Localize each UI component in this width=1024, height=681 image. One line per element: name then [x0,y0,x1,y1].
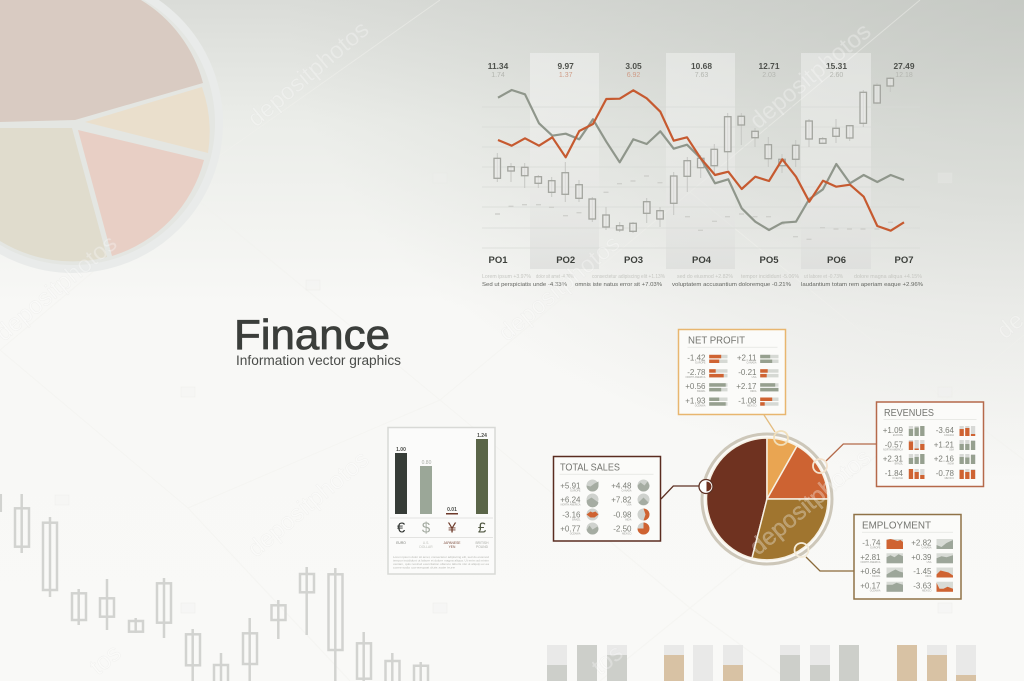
currency symbols: $ [422,520,431,536]
currency names: JAPANESE [444,541,461,545]
net profit values: -1.08 [738,396,757,406]
top values: 12.71 [759,61,780,71]
top values [488,61,915,71]
connector: net profit [764,415,775,432]
employment values: -1.74 [862,538,881,548]
net profit heading: NET PROFIT [688,336,745,346]
total sales values: EUROPE [570,490,581,492]
net profit values: BRAZIL [697,390,706,393]
employment values: MEXICO [922,590,932,592]
net profit values: USA [752,376,757,379]
employment values: EUROPE [870,546,881,550]
period labels: PO7 [894,255,914,266]
net profit values: +2.11 [737,354,757,362]
net profit values: NORTH AMERICA [686,376,706,379]
employment area charts [886,539,953,592]
currency bar chart card [388,428,495,574]
red line series [498,90,904,231]
currency symbols: € [397,520,406,536]
period labels: PO2 [556,255,575,266]
total sales heading: TOTAL SALES [560,462,620,474]
big background pie chart [0,0,219,269]
chart captions: Lorem ipsum +3.97% [482,274,531,280]
title: Finance [234,311,390,358]
revenues values: -0.78 [936,469,955,478]
net profit values: -2.78 [687,368,706,377]
total sales values: MEXICO [622,532,632,536]
employment values: BRAZIL [872,575,881,578]
revenues values: BRAZIL [895,462,904,466]
currency values: 1.24 [477,433,487,439]
chart captions: ut labore et -0.73% [804,274,843,280]
employment values [860,538,932,592]
currency names [396,541,489,549]
chart captions: sed do eiusmod +2.82% [677,274,733,280]
connector: employment [806,557,854,571]
total sales values: -0.98 [613,510,632,520]
net profit bars [709,355,778,406]
revenues heading: REVENUES [884,408,934,419]
net profit values: -0.21 [738,368,757,377]
net profit values: OCEANIA [695,404,706,408]
chart shaded columns [530,53,871,269]
revenues values: MEXICO [945,477,954,480]
employment values: +2.82 [911,538,932,548]
top values: 27.49 [894,61,915,71]
total sales values: -3.16 [562,510,581,520]
subtitle: Information vector graphics [236,353,401,368]
currency values [396,433,487,513]
grey line series [498,90,904,230]
currency bars [395,439,488,514]
currency values: 1.00 [396,447,406,453]
period labels: PO1 [488,255,508,266]
total sales values: NORTH AMERICA [561,504,581,506]
candlesticks [494,77,894,239]
card paragraph: tempor incididunt ut labore et dolore magna aliqua. Ut enim ad minim [393,558,490,562]
net profit values: CANADA [747,362,757,364]
total sales values: BRAZIL [572,518,581,522]
chart captions: dolore magna aliqua +4.15% [854,274,922,280]
revenues values: USA [949,448,954,452]
employment values: INDIA [925,575,932,578]
currency symbols [397,520,487,536]
chart captions: laudantium totam rem aperiam eaque +2.96% [801,282,923,288]
total sales values: +4.48 [611,482,632,490]
marker: employment [794,543,808,557]
net profit values: EUROPE [695,362,706,364]
top values: 3.05 [625,61,642,71]
employment values: +0.64 [860,567,881,576]
revenues values: +2.31 [883,454,904,464]
revenues values: +1.09 [883,426,904,435]
main pie chart [699,431,832,564]
revenues values: OCEANIA [892,477,903,480]
revenues values: +1.21 [934,440,955,450]
decorative candlesticks bottom left [1,494,428,681]
secondary values: 6.92 [627,72,640,79]
employment values: CANADA [922,546,932,550]
employment values: OCEANIA [870,590,881,592]
employment values: USA [927,561,932,564]
currency names: YEN [449,545,456,549]
total sales pies [586,480,650,534]
revenues mini bars [909,426,975,479]
revenues values: NORTH AMERICA [883,448,903,452]
total sales values: +6.24 [560,496,581,504]
currency names: POUND [476,545,489,549]
total sales values: -2.50 [613,524,632,534]
currency names: DOLLAR [419,545,433,549]
top values: 9.97 [558,61,574,71]
stock watermark: depositphotos [243,446,374,563]
net profit values: -1.42 [687,354,706,362]
chart captions: dolor sit amet -4.76% [536,274,574,280]
period labels [488,255,914,266]
total sales values: +7.82 [611,496,632,504]
chart captions: consectetur adipiscing elit +1.13% [592,274,665,280]
chart captions [482,274,923,288]
total sales values: USA [627,504,632,506]
total sales values: +0.77 [560,524,581,534]
total sales values: +5.91 [560,482,581,490]
total sales values: INDIA [625,518,632,522]
card paragraph: commodo consequat duis aute irure [393,566,456,570]
employment values: +0.39 [911,553,932,562]
card paragraph: Lorem ipsum dolor sit amet, consectetur adipiscing elit, sed do eiusmod [393,555,489,559]
top values: 10.68 [691,61,712,71]
secondary values: 12.18 [895,72,913,79]
employment heading: EMPLOYMENT [862,520,931,532]
chart captions: omnis iste natus error sit +7.03% [575,282,662,288]
chart captions: tempor incididunt -5.06% [741,274,799,280]
employment values: +2.81 [860,553,881,562]
net profit values [685,354,757,408]
currency names: U.S. [423,541,429,545]
decorative bars bottom right [547,645,976,681]
period labels: PO6 [827,255,846,266]
currency names: EURO [396,541,406,545]
card paragraph: veniam, quis nostrud exercitation ullamco laboris nisi ut aliquip ex ea [393,562,489,566]
chart captions: voluptatem accusantium doloremque -0.21% [672,282,791,288]
employment values: -3.63 [913,582,932,590]
panel: net profit [678,330,786,414]
panel: total sales [554,456,660,541]
revenues values [883,426,955,480]
line and candlestick chart [482,53,923,288]
top values: 11.34 [488,61,509,71]
revenues values: -3.64 [936,426,955,435]
net profit values: +0.56 [685,382,706,391]
secondary values: 7.63 [695,72,708,79]
employment values: -1.45 [913,567,932,576]
marker: net profit [774,431,788,445]
secondary values: 2.60 [830,72,843,79]
net profit values: +1.93 [685,396,706,406]
revenues values: -1.84 [885,469,904,478]
revenues values: EUROPE [893,434,903,437]
stock watermark: tos [587,639,628,681]
employment values: +0.17 [860,582,881,590]
secondary values: 1.37 [559,72,573,79]
secondary values: 1.74 [491,72,505,79]
revenues values: CANADA [944,434,954,437]
currency symbols: ¥ [447,520,457,536]
revenues values: -0.57 [885,440,904,450]
stock watermark: depositphotos [745,444,876,561]
marker: total sales [699,480,713,494]
panel: revenues [876,402,984,486]
stock watermark: depositphotos [745,18,876,135]
marker: revenues [813,459,827,473]
employment values: NORTH AMERICA [861,561,881,564]
chart captions: Sed ut perspiciatis unde -4.33% [482,282,567,288]
stock watermark: depositphotos [494,230,625,347]
secondary values [491,72,913,79]
period labels: PO5 [759,255,779,266]
currency values: 0.80 [422,460,432,466]
revenues values: INDIA [948,462,954,466]
total sales values [560,482,632,536]
stock watermark: tos [85,639,126,681]
card paragraph [393,555,490,570]
period labels: PO4 [692,255,712,266]
panel: employment [854,514,961,599]
net profit values: INDIA [750,390,757,393]
net profit values: +2.17 [736,382,757,391]
connector: revenues [826,444,876,461]
revenues values: +2.16 [934,454,955,464]
top values: 15.31 [826,61,847,71]
total sales values: CANADA [622,490,632,492]
secondary values: 2.03 [762,72,776,79]
stock watermark: depositphotos [243,16,374,133]
currency values: 0.01 [447,507,457,513]
currency symbols: £ [478,520,487,536]
period labels: PO3 [624,255,643,266]
net profit values: MEXICO [747,404,757,408]
connector: total sales [661,486,699,499]
total sales values: OCEANIA [570,532,581,536]
currency names: BRITISH [475,541,489,545]
